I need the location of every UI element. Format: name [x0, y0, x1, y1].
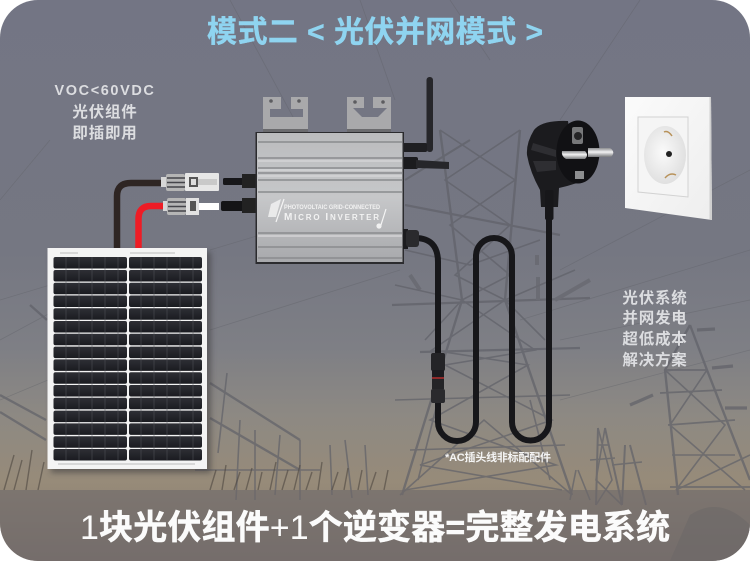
text block: VOC input note: 光伏组件: [72, 102, 138, 121]
inline waterproof connector: [431, 353, 445, 403]
AC cable: [415, 218, 549, 441]
male connector: [161, 177, 166, 187]
central pylon: [392, 130, 590, 495]
accessory footnote: *AC插头线非标配配件: [445, 450, 551, 464]
overhead wires: [0, 0, 750, 400]
right pylon: [630, 325, 750, 495]
title: 模式二 < 光伏并网模式 >: [207, 16, 543, 49]
hill silhouette: [702, 507, 750, 561]
female connector: [163, 201, 167, 211]
bottom summary heading: 1块光伏组件+1个逆变器=完整发电系统: [80, 509, 670, 547]
mounting brackets: [263, 97, 391, 132]
bottom translucent band: [0, 490, 750, 561]
micro inverter: PHOTOVOLTAIC GRID-CONNECTED: [284, 204, 380, 211]
micro inverter: [256, 132, 404, 264]
antenna: [402, 77, 449, 169]
text block: system benefits: 并网发电: [622, 308, 688, 327]
text block: VOC input note: VOC<60VDC: [54, 83, 156, 99]
wall socket: [625, 97, 712, 220]
micro inverter: MICRO INVERTER: [284, 212, 379, 223]
MC4 connectors: [161, 173, 256, 215]
text block: VOC input note: 即插即用: [72, 123, 138, 142]
text block: system benefits: 超低成本: [622, 329, 688, 348]
AC plug: [527, 120, 613, 220]
text block: system benefits: 解决方案: [622, 350, 688, 369]
text block: system benefits: [622, 288, 688, 369]
text block: system benefits: 光伏系统: [622, 288, 688, 307]
text block: VOC input note: [54, 83, 156, 142]
cable: black and red DC leads: [117, 183, 165, 250]
solar panel: [48, 248, 211, 473]
left pylon and substation: [0, 305, 368, 500]
dark substation ground: [4, 450, 388, 490]
logo mark: [268, 199, 386, 229]
distant pylons: [570, 428, 646, 505]
busbars: [66, 257, 193, 460]
AC cable gland: [403, 229, 419, 249]
inverter DC leads: [223, 178, 256, 185]
